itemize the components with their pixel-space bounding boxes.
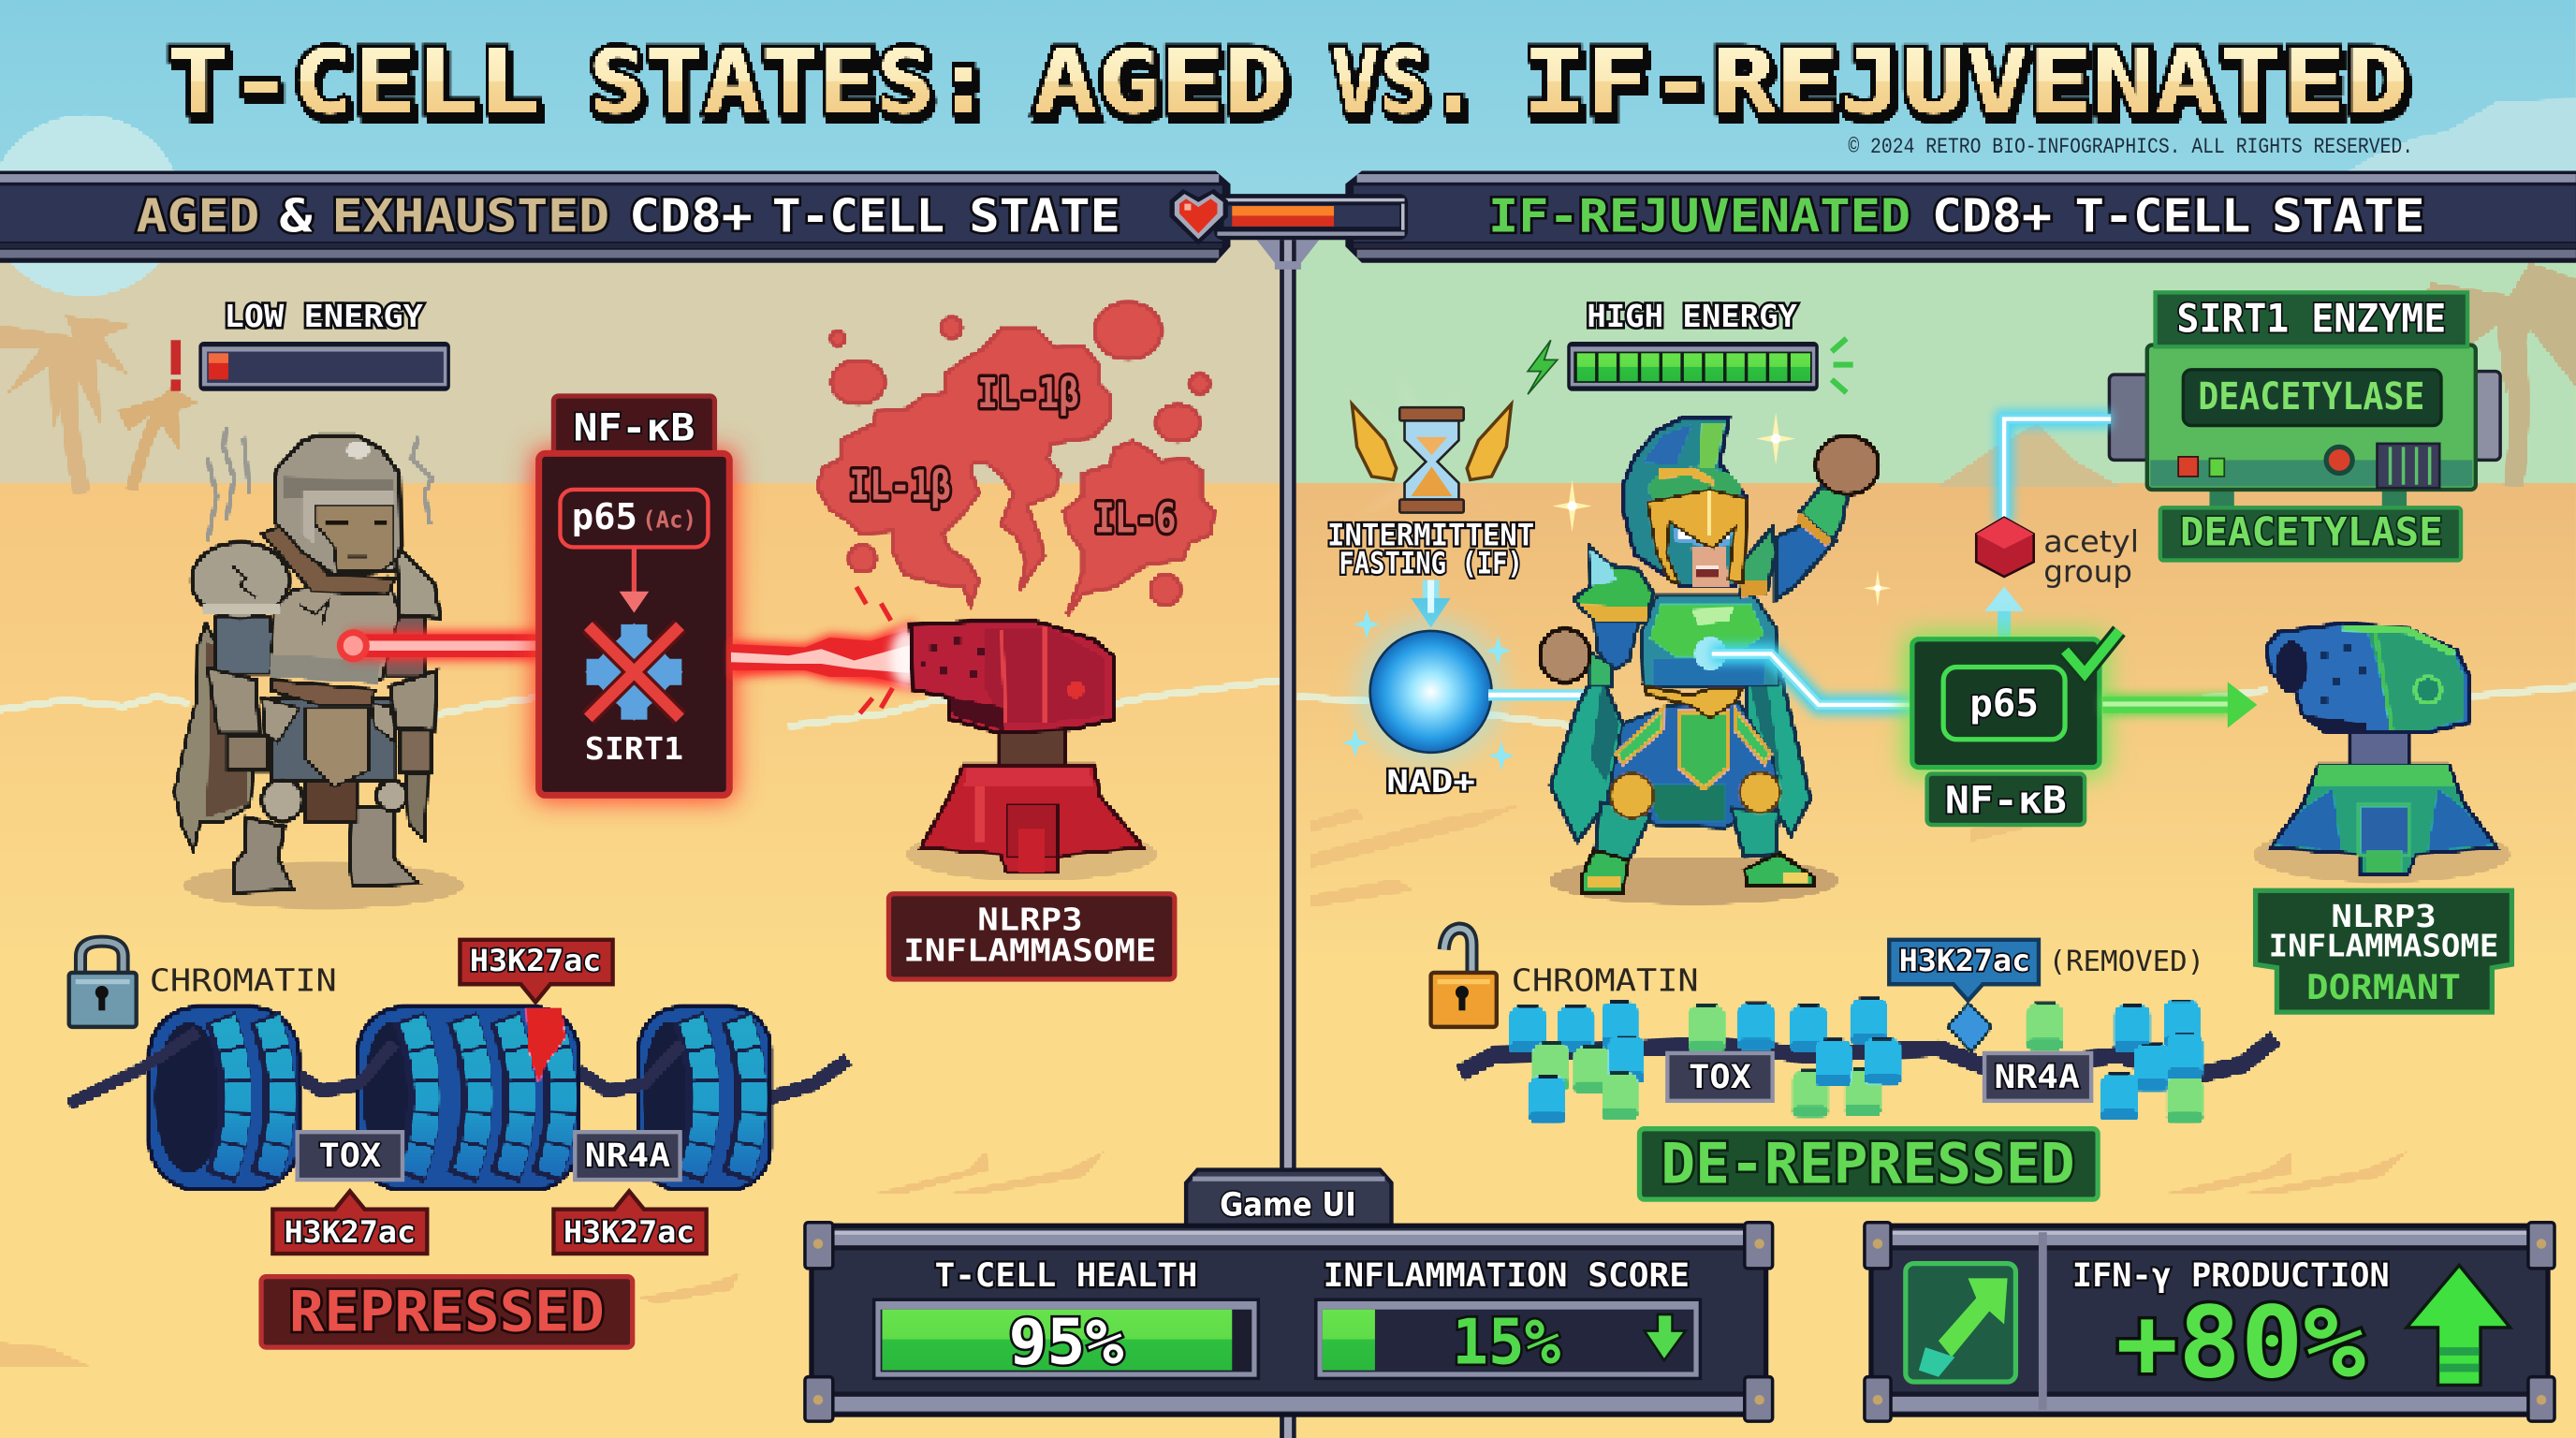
header bar: aged state: STATE xyxy=(969,188,1120,242)
chromatin: condensed and repressed xyxy=(69,940,848,1347)
beam: knight to NF-kB xyxy=(337,629,542,662)
p65 acetylated pill: (Ac) xyxy=(642,506,696,533)
health meter: heart and bar xyxy=(1170,189,1408,244)
mark: H3K27ac top xyxy=(460,940,613,1003)
icon: acetyl group cube xyxy=(1976,518,2034,577)
panel: IF-rejuvenated state xyxy=(1327,171,2576,1199)
label: NLRP3 inflammasome dormant: INFLAMMASOME xyxy=(2269,927,2498,963)
character: aged knight xyxy=(175,427,463,909)
header bar: aged state xyxy=(0,171,1230,263)
low energy meter: LOW ENERGY xyxy=(225,298,423,334)
SIRT1 enzyme machine: SIRT1 ENZYME xyxy=(2176,296,2446,342)
label: NLRP3 inflammasome: NLRP3 xyxy=(977,901,1083,937)
NF-kB complex blocked: NF-κB xyxy=(573,405,695,449)
gene tag: TOX: TOX xyxy=(1689,1058,1751,1096)
panel: IF-rejuvenated state: acetyl xyxy=(2043,526,2139,560)
label: intermittent fasting: FASTING (IF) xyxy=(1339,547,1523,580)
panel: IFN-gamma production: IFN-γ PRODUCTION xyxy=(2072,1256,2390,1295)
tab: Game UI xyxy=(1186,1170,1391,1227)
title: IF-REJUVENATED xyxy=(1523,31,2408,134)
sparkles xyxy=(1552,413,1892,607)
gene tag: NR4A: NR4A xyxy=(585,1137,670,1175)
icon: NAD+ orb xyxy=(1342,609,1515,770)
status: repressed: REPRESSED xyxy=(289,1281,605,1345)
mark: H3K27ac at TOX: H3K27ac xyxy=(285,1216,416,1250)
label: NLRP3 inflammasome dormant xyxy=(2256,890,2511,1012)
beam: NF-kB to inflammasome turret xyxy=(731,586,923,715)
mark: H3K27ac at NR4A: H3K27ac xyxy=(564,1216,695,1250)
panel: IFN-gamma production xyxy=(1865,1223,2554,1421)
title: AGED xyxy=(1033,31,1288,134)
gene tag: TOX: TOX xyxy=(318,1137,381,1175)
beam: hero to p65 xyxy=(1712,653,1914,705)
title: VS. xyxy=(1331,31,1478,134)
tab: Game UI: Game UI xyxy=(1220,1186,1356,1225)
arrow: p65 to SIRT1 xyxy=(620,549,649,613)
label: NLRP3 inflammasome dormant: NLRP3 xyxy=(2331,898,2437,934)
high energy meter xyxy=(1528,298,1853,394)
beam: SIRT1 to acetyl group xyxy=(2004,419,2111,522)
header bar: rejuvenated state: T-CELL xyxy=(2075,188,2250,242)
header bar: aged state: AGED xyxy=(137,188,259,242)
palm trees left xyxy=(0,315,198,492)
label: NLRP3 inflammasome: INFLAMMASOME xyxy=(903,932,1157,969)
title xyxy=(168,31,2408,134)
palm tree right xyxy=(2415,263,2576,486)
header bar: rejuvenated state: STATE xyxy=(2272,188,2424,242)
icon: closed lock xyxy=(69,942,137,1027)
stat: T-cell health xyxy=(872,1256,1260,1380)
smoke: inflammatory cytokines xyxy=(817,302,1214,615)
mark: H3K27ac top: H3K27ac xyxy=(470,945,601,978)
gene tag: TOX xyxy=(298,1132,402,1180)
stat: inflammation score: INFLAMMATION SCORE xyxy=(1324,1256,1690,1295)
panel: T-cell stats xyxy=(805,1223,1773,1421)
copyright note: © 2024 RETRO BIO-INFOGRAPHICS. ALL RIGHTS RESERVED. xyxy=(1848,135,2413,159)
nucleosomes on DNA xyxy=(69,1007,848,1190)
arrow: p65 to dormant turret xyxy=(2102,682,2257,727)
title: T-CELL xyxy=(168,31,540,134)
chromatin: condensed and repressed: CHROMATIN xyxy=(150,961,337,998)
gene tag: NR4A xyxy=(1984,1053,2091,1101)
low energy meter xyxy=(171,298,450,391)
open DNA strand and nucleosome blocks xyxy=(1460,997,2276,1123)
chromatin: open and de-repressed: CHROMATIN xyxy=(1512,961,1699,998)
label: NLRP3 inflammasome dormant: DORMANT xyxy=(2306,967,2461,1007)
label: intermittent fasting xyxy=(1327,520,1534,580)
label: NLRP3 inflammasome xyxy=(888,894,1175,979)
panel: IF-rejuvenated state: group xyxy=(2043,555,2132,589)
label: intermittent fasting: INTERMITTENT xyxy=(1327,520,1534,553)
panel: IFN-gamma production: +80% xyxy=(2115,1285,2365,1401)
stat: T-cell health: T-CELL HEALTH xyxy=(935,1256,1197,1295)
icon: winged hourglass xyxy=(1331,370,1536,526)
arrow: p65 to acetyl group xyxy=(1984,587,2024,638)
smoke: inflammatory cytokines: IL-6 xyxy=(1094,495,1177,543)
mark: H3K27ac at NR4A xyxy=(553,1191,707,1254)
header bar: rejuvenated state xyxy=(1345,171,2576,263)
mark: H3K27ac removed: (REMOVED) xyxy=(2048,946,2204,978)
header bar: aged state: EXHAUSTED xyxy=(332,188,609,242)
mark: H3K27ac removed xyxy=(1889,940,2204,1001)
beam: NAD+ to hero xyxy=(1488,689,1586,700)
panel: aged and exhausted state xyxy=(0,171,1230,1347)
header bar: aged state: T-CELL xyxy=(772,188,944,242)
icon: open lock xyxy=(1431,929,1497,1027)
turret: red NLRP3 inflammasome xyxy=(907,622,1157,881)
NF-kB complex active xyxy=(1906,631,2119,825)
character: rejuvenated hero xyxy=(1540,418,1879,904)
icon: SIRT1 gear crossed out xyxy=(585,624,683,721)
icon: boost arrow xyxy=(1906,1264,2015,1382)
header bar: aged state: & xyxy=(279,188,313,242)
gene tag: NR4A xyxy=(575,1132,681,1180)
smoke: inflammatory cytokines: IL-1β xyxy=(977,370,1079,418)
NF-kB complex blocked: SIRT1 xyxy=(585,730,683,767)
header bar: rejuvenated state: CD8+ xyxy=(1932,188,2052,242)
gene tag: TOX xyxy=(1667,1053,1773,1101)
chromatin: open and de-repressed xyxy=(1431,929,2276,1199)
status: de-repressed: DE-REPRESSED xyxy=(1661,1133,2075,1197)
high energy meter: HIGH ENERGY xyxy=(1587,298,1797,334)
stat: inflammation score xyxy=(1314,1256,1702,1380)
mark: H3K27ac removed: H3K27ac xyxy=(1899,945,2030,978)
title: STATES: xyxy=(588,31,992,134)
arrow: fasting to NAD+ xyxy=(1412,580,1451,627)
stat: inflammation score: 15% xyxy=(1452,1306,1560,1379)
central divider xyxy=(1257,240,1319,1438)
NF-kB complex blocked xyxy=(534,396,734,800)
mark: H3K27ac at TOX xyxy=(272,1191,427,1254)
header bar: aged state: CD8+ xyxy=(629,188,753,242)
label: deacetylase: DEACETYLASE xyxy=(2180,509,2443,555)
p65 acetylated pill xyxy=(560,490,708,547)
p65 acetylated pill: p65 xyxy=(572,496,637,538)
NF-kB complex active: p65 xyxy=(1969,682,2039,726)
gene tag: NR4A: NR4A xyxy=(1995,1058,2080,1096)
panel: IF-rejuvenated state: NAD+ xyxy=(1386,763,1475,800)
SIRT1 enzyme machine: DEACETYLASE xyxy=(2198,374,2424,418)
stat: T-cell health: 95% xyxy=(1009,1306,1123,1379)
smoke: inflammatory cytokines: IL-1β xyxy=(849,462,951,510)
NF-kB complex active: NF-κB xyxy=(1945,779,2067,823)
header bar: rejuvenated state: IF-REJUVENATED xyxy=(1488,188,1910,242)
arrow: up xyxy=(2407,1265,2510,1385)
turret: dormant NLRP3 inflammasome xyxy=(2254,624,2510,882)
SIRT1 enzyme machine xyxy=(2109,292,2500,560)
